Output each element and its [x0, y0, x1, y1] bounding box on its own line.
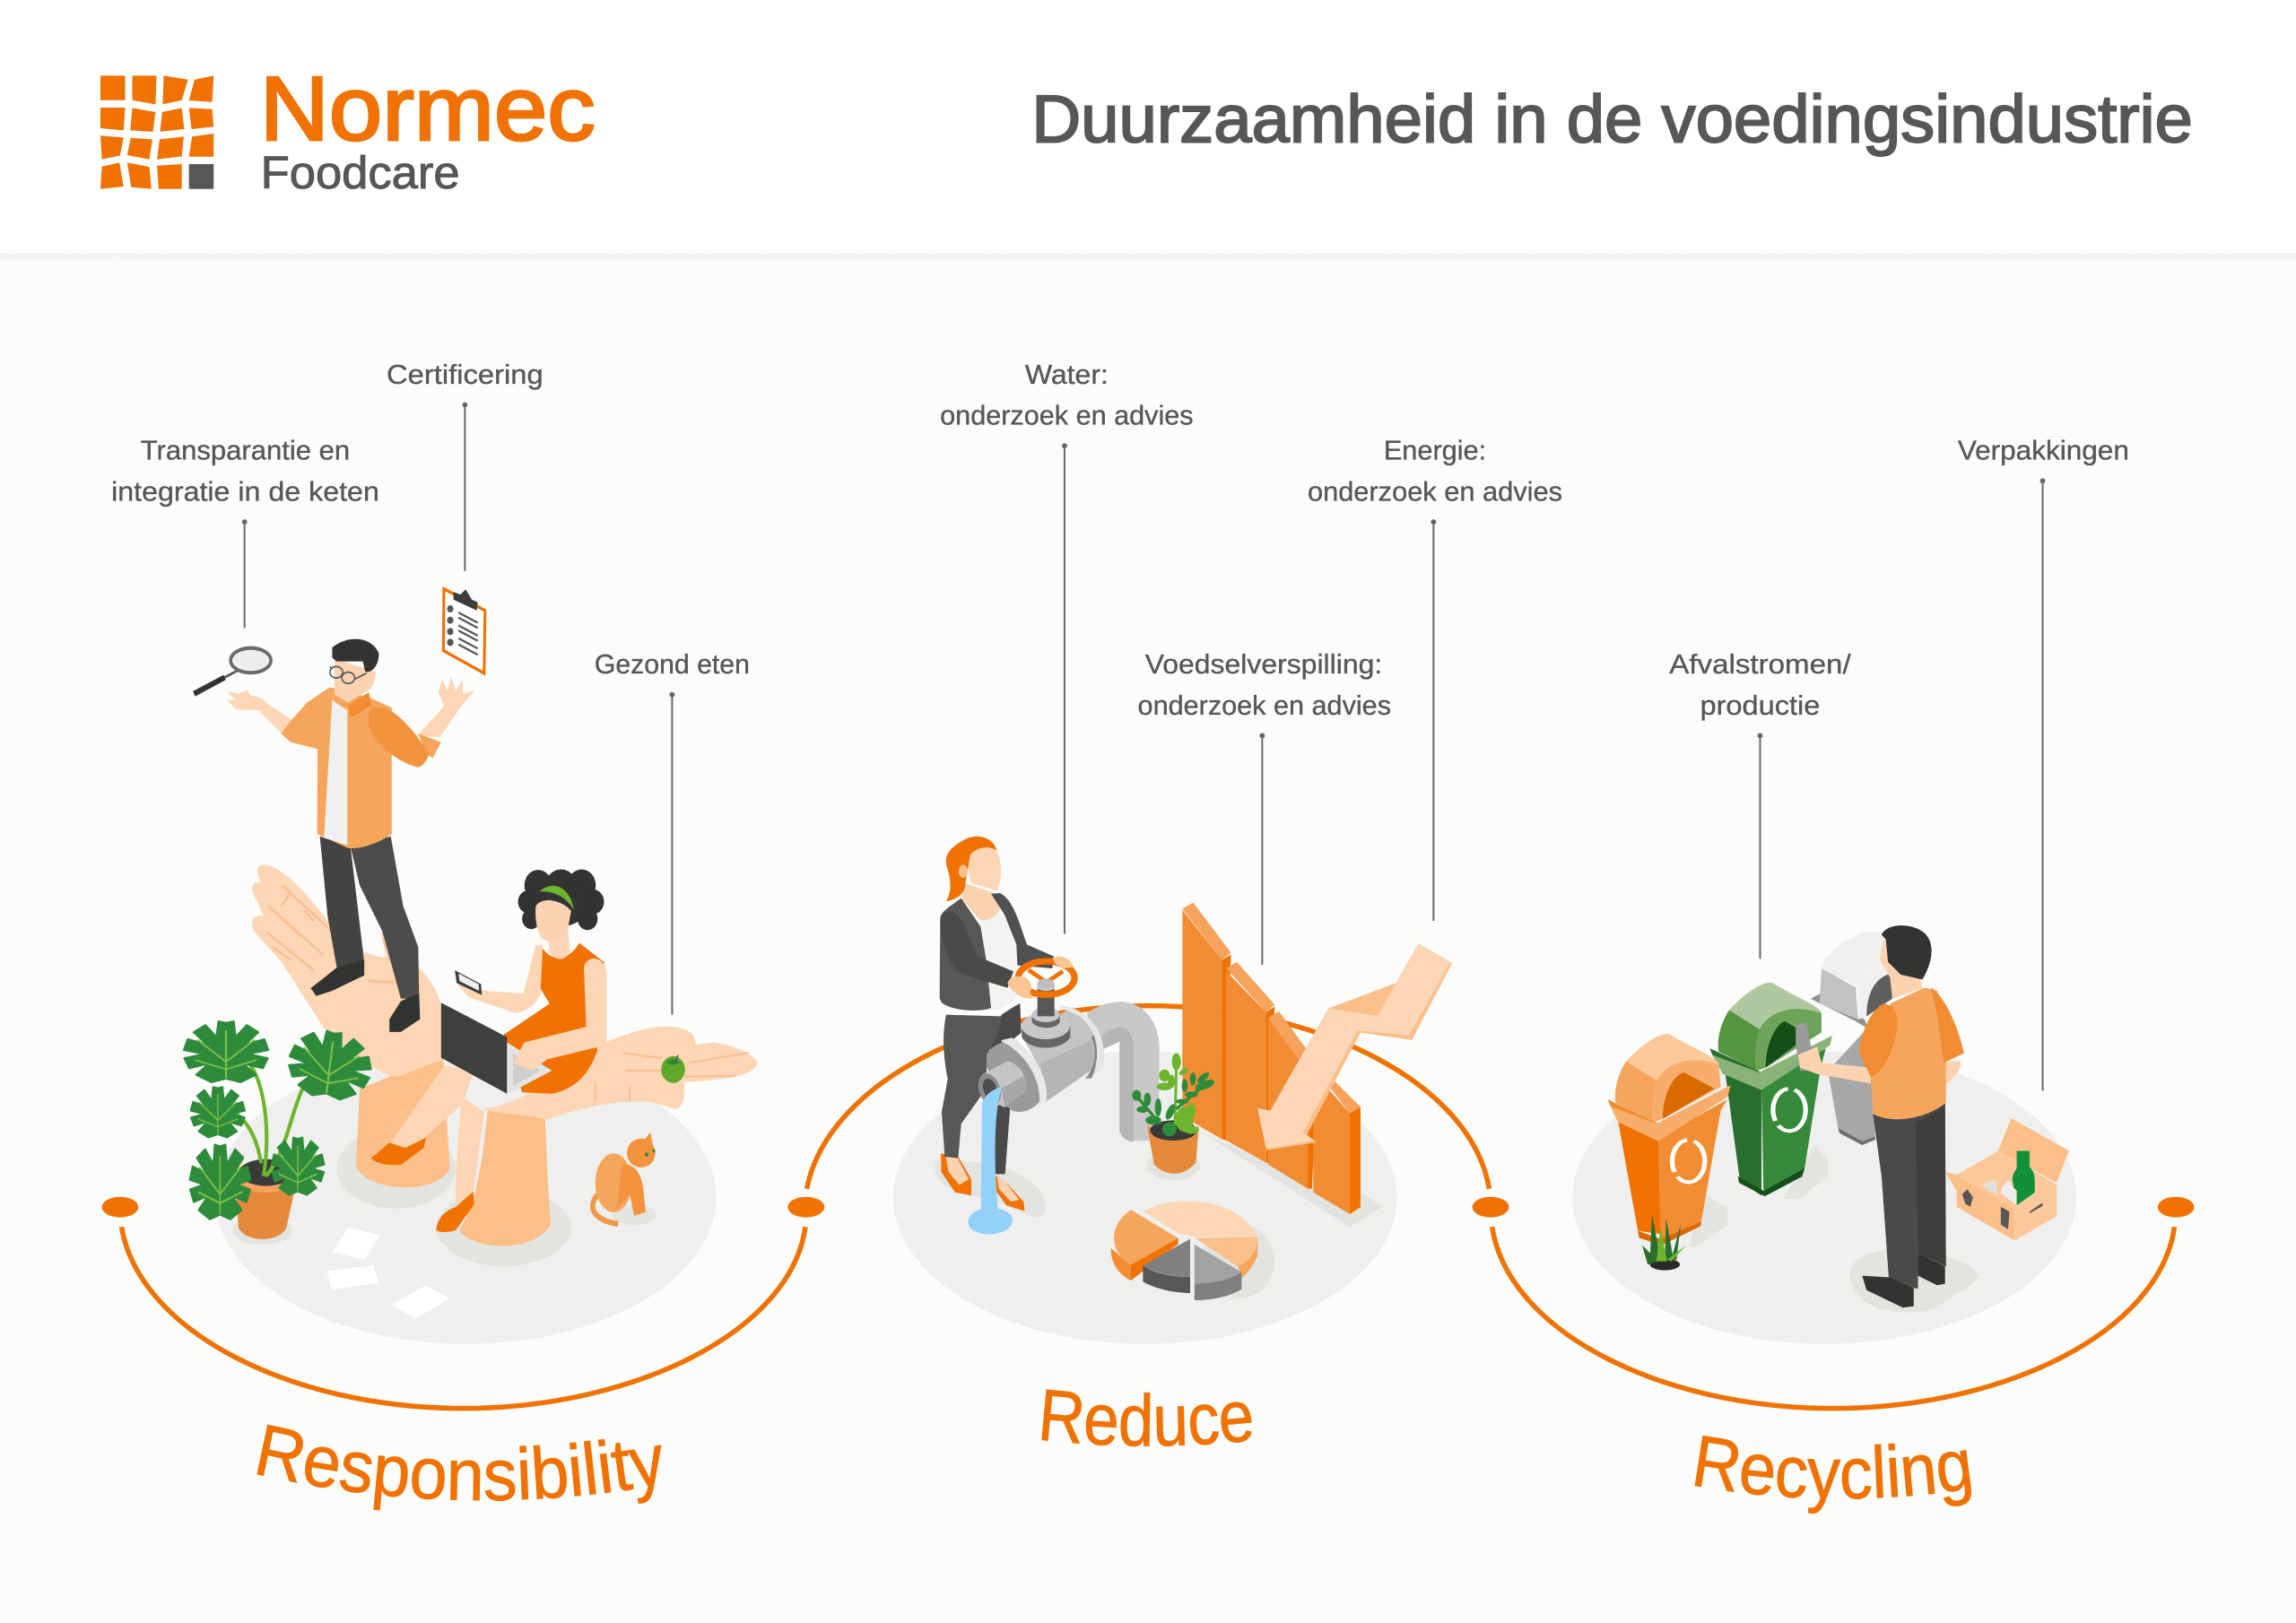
label: Energie: Energie:: [1384, 437, 1486, 466]
logo mark: [100, 75, 213, 189]
label: Voedselverspilling: onderzoek en advies: [1138, 691, 1391, 721]
man sleeve: [418, 733, 441, 758]
man shoes: [310, 960, 364, 996]
cat: [593, 1133, 657, 1225]
label: Certificering: Certificering: [387, 360, 544, 390]
right hand: [483, 1027, 758, 1120]
label: Voedselverspilling: [1138, 650, 1391, 721]
floor shadows: [935, 1131, 1382, 1298]
valve body: [1021, 1007, 1099, 1103]
woman, pipe and valve: [940, 837, 1160, 1174]
illustration: responsibility scene: [184, 589, 758, 1319]
small plant: [1132, 1054, 1216, 1180]
label: Energie: onderzoek en advies: [1308, 477, 1562, 507]
illustration: reduce scene: [935, 837, 1453, 1300]
ground disc: recycling: [1572, 1051, 2076, 1344]
woman shoes: [371, 1138, 426, 1165]
label line: transparantie: [242, 519, 248, 628]
label line: verpakkingen: [2040, 478, 2045, 1090]
label: Transparantie en integratie in de keten: [111, 437, 379, 507]
label line: water: [1062, 443, 1067, 934]
left hand: [252, 864, 442, 1077]
man from behind: [1796, 925, 1964, 1307]
label: Afvalstromen/productie: [1669, 650, 1851, 721]
downward arrow: [1257, 943, 1453, 1150]
illustration: recycling scene: [1608, 925, 2069, 1313]
woman head: [518, 870, 604, 959]
label: Afvalstromen/productie: productie: [1700, 691, 1820, 721]
label: Water: [940, 360, 1194, 430]
label: Verpakkingen: Verpakkingen: [1958, 437, 2129, 466]
woman legs: [387, 1065, 474, 1150]
trousers: [1873, 1103, 1946, 1289]
head: [968, 846, 1001, 890]
heading: Recycling: Recycling: [1695, 1435, 1971, 1514]
man head: [335, 659, 376, 703]
label: Water: Water:: [1025, 360, 1109, 390]
connecting path with dots: [101, 1006, 2195, 1409]
label: Energie: [1308, 437, 1562, 507]
label: Transparantie en integratie in de keten: Transparantie en: [141, 437, 350, 466]
green bottle: [2013, 1150, 2035, 1205]
label line: certificering: [462, 403, 467, 571]
neck: [1880, 940, 1922, 999]
shoes: [1862, 1276, 1914, 1307]
icon: clipboard: [443, 589, 485, 673]
label: Gezond eten: Gezond eten: [595, 650, 750, 680]
arm: [1798, 1046, 1871, 1083]
bin shadows: [1689, 1144, 1979, 1313]
valve stem: [1022, 1026, 1070, 1048]
green bin: [1710, 983, 1832, 1196]
grey bin: [1811, 932, 1899, 1145]
label line: energie: [1431, 519, 1436, 921]
hair: [1882, 925, 1932, 979]
label: Afvalstromen/productie: Afvalstromen/: [1669, 650, 1851, 680]
man jacket: [281, 687, 392, 848]
water stream: [968, 1086, 1013, 1234]
left arm column: [356, 1055, 450, 1187]
pipe: [1087, 1002, 1160, 1141]
bar chart: [1182, 902, 1361, 1214]
woman dress: [504, 943, 604, 1094]
woman front arm: [513, 959, 607, 1071]
ground disc: reduce: [893, 1051, 1397, 1344]
heading: Responsibility: Responsibility: [257, 1424, 662, 1510]
logo word Normec: Normec: [260, 58, 596, 160]
valve wheel: [1029, 970, 1063, 981]
trousers: [993, 1103, 1011, 1174]
man arms: [227, 690, 293, 733]
woman back arm: [458, 944, 543, 1013]
cardboard box: [1945, 1118, 2069, 1240]
heading: Reduce: Reduce: [1041, 1390, 1252, 1447]
man trousers: [320, 837, 364, 968]
back arm: [1944, 1061, 1961, 1083]
ground disc: responsibility: [215, 1051, 716, 1344]
icon: magnifier: [194, 648, 271, 694]
logo: Normec Foodcare: [100, 58, 596, 198]
phone: [455, 970, 482, 995]
pie chart: [1110, 1201, 1257, 1300]
label: Water: onderzoek en advies: [940, 401, 1194, 430]
man shirt: [324, 700, 347, 846]
title: Duurzaamheid in de voedingsindustrie: [1031, 81, 2193, 156]
label line: afvalstromen: [1758, 733, 1762, 959]
shirt: [1871, 987, 1946, 1119]
sleeve: [1859, 1003, 1897, 1077]
potted monstera: [184, 1021, 375, 1245]
right arm column: [459, 1109, 551, 1246]
heading: Reduce: [1041, 1390, 1252, 1447]
label: Transparantie en integratie in de keten: integratie in de keten: [111, 477, 379, 507]
label: Voedselverspilling: Voedselverspilling:: [1145, 650, 1382, 680]
paper sheets: [326, 1228, 450, 1319]
bottle: [1796, 1023, 1815, 1071]
logo word Foodcare: Foodcare: [261, 147, 460, 198]
label line: voedselverspilling: [1259, 733, 1265, 965]
torso: [979, 908, 1017, 1011]
label line: gezond eten: [669, 692, 674, 1014]
orange bin: [1608, 1034, 1731, 1245]
laptop: [441, 1002, 552, 1094]
apple: [661, 1055, 685, 1083]
aloe plant: [1642, 1215, 1686, 1271]
